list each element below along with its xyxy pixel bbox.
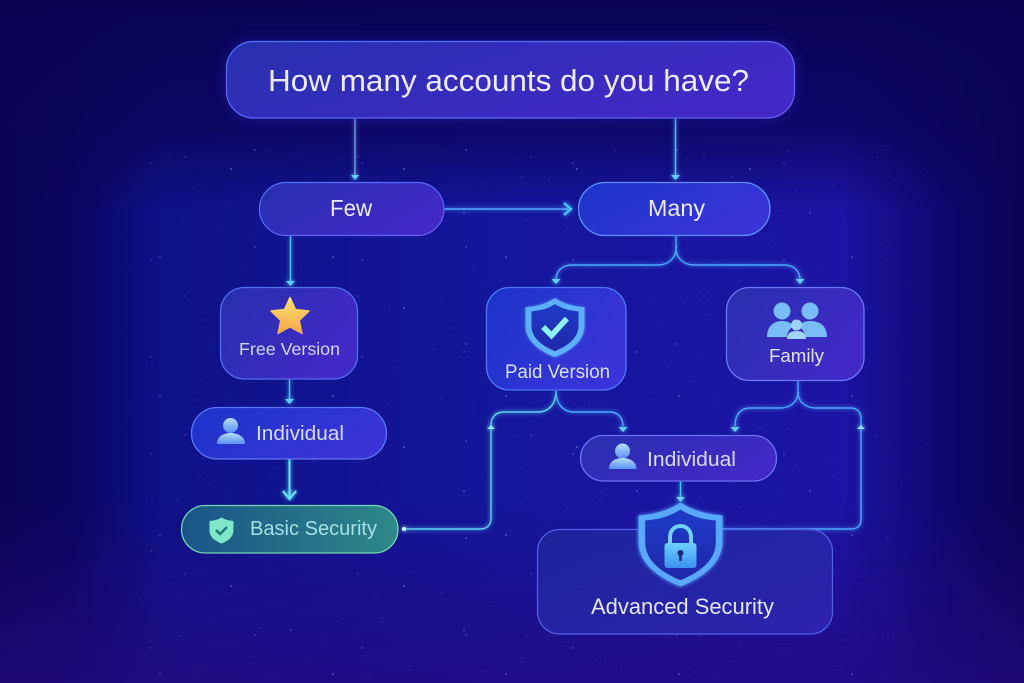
arrow: free version to individual xyxy=(285,379,294,404)
arrow: question to many xyxy=(671,118,680,180)
question box xyxy=(226,41,795,118)
connectors xyxy=(283,118,865,531)
label: individual: Individual xyxy=(256,423,344,445)
arrow: few to many xyxy=(444,203,571,215)
icon: check shield xyxy=(526,298,584,357)
arrow: paid version to individual xyxy=(556,391,628,432)
panel: free version xyxy=(220,288,358,379)
label: basic security: Basic Security xyxy=(250,518,377,540)
node: many: Many xyxy=(648,195,705,221)
node: few xyxy=(260,182,444,236)
arrow: many branches xyxy=(552,236,804,284)
label: family: Family xyxy=(769,346,824,366)
icon: green shield xyxy=(210,518,234,544)
node: individual (right) xyxy=(580,436,776,481)
label: paid version: Paid Version xyxy=(505,362,610,383)
icon: star xyxy=(271,298,309,334)
arrow: family to individual xyxy=(730,381,798,432)
arrow: question to few xyxy=(351,118,359,180)
node: many xyxy=(578,182,770,236)
icon: family xyxy=(767,302,827,339)
panel: family xyxy=(726,288,864,380)
label: individual: Individual xyxy=(647,449,736,471)
arrow: basic security to paid version xyxy=(402,391,556,531)
arrow: individual to advanced shield xyxy=(676,481,685,502)
label: advanced security: Advanced Security xyxy=(591,594,774,619)
panel: advanced security xyxy=(538,502,832,634)
panel: paid version xyxy=(486,288,626,390)
icon: person xyxy=(217,418,245,444)
icon: lock shield xyxy=(638,502,722,586)
icon: person xyxy=(609,444,636,469)
arrow: individual to basic security xyxy=(283,459,296,499)
arrow: few to free version xyxy=(286,236,295,286)
node: basic security xyxy=(182,506,398,553)
label: free version: Free Version xyxy=(239,339,340,359)
question box: How many accounts do you have? xyxy=(268,63,749,98)
node: individual (left) xyxy=(192,408,386,459)
node: few: Few xyxy=(330,195,372,221)
arrow: family to advanced security xyxy=(722,392,865,529)
